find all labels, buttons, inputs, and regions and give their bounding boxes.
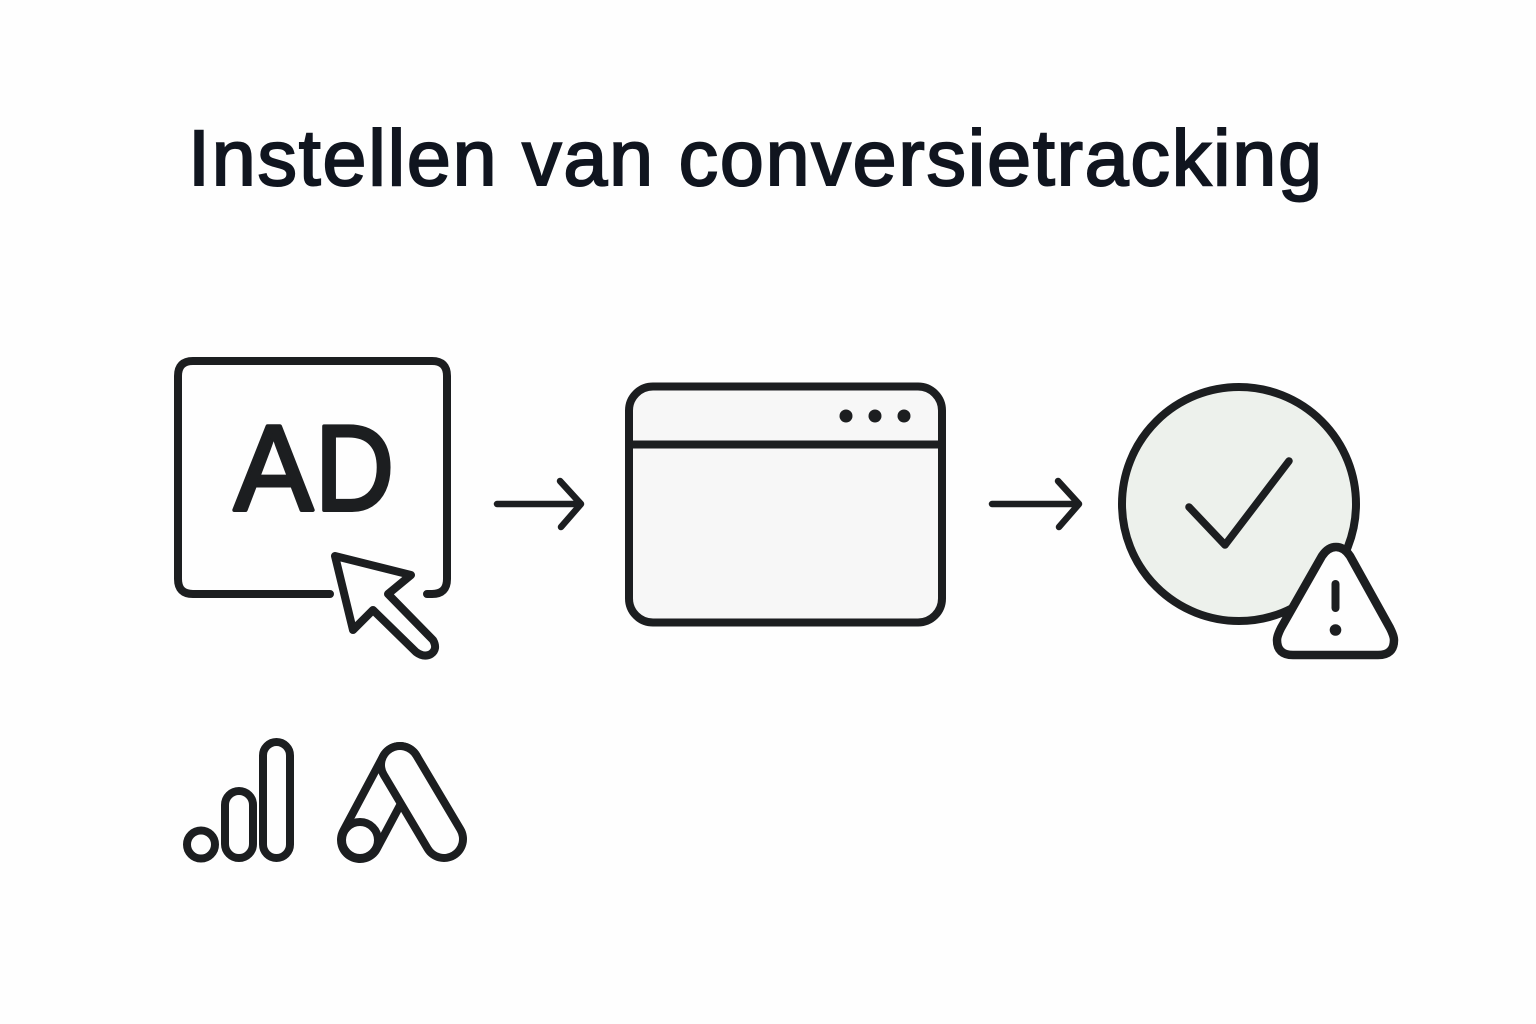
ad label	[234, 400, 394, 536]
icon: cursor	[335, 556, 435, 656]
icon: check circle with warning	[1122, 387, 1394, 655]
arrow: ad to browser	[497, 481, 581, 527]
window dots	[840, 410, 910, 422]
ad label: D	[315, 400, 394, 536]
icon: analytics bars	[187, 742, 290, 858]
ad label: A	[234, 400, 314, 536]
arrow: browser to check	[992, 481, 1079, 527]
title: Instellen van conversietracking	[188, 113, 1322, 202]
icon: google ads logo	[342, 765, 444, 858]
icon: browser window	[629, 386, 942, 622]
warning triangle	[1277, 547, 1394, 655]
icon: ad card with cursor	[178, 361, 447, 656]
